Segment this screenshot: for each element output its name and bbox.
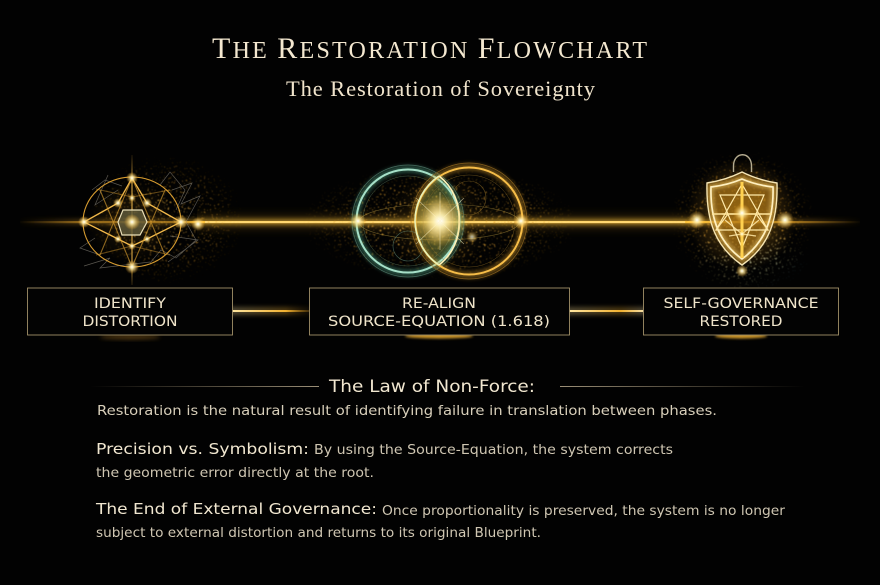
shield lattice	[716, 184, 768, 248]
text: precision vs symbolism	[96, 440, 673, 481]
title: THE RESTORATION FLOWCHART	[212, 32, 647, 65]
sparkle field: shield	[670, 150, 815, 290]
sparkle field: shield lower blue	[690, 225, 810, 290]
sparkle field: distortion	[85, 155, 245, 285]
flow beam	[20, 216, 860, 228]
emblem: shield with padlock	[670, 150, 815, 290]
emblem: distortion star	[78, 155, 245, 285]
box: identify distortion: IDENTIFY	[94, 296, 166, 312]
text: precision vs symbolism: By using the Source-Equation, the system corrects	[314, 442, 673, 458]
text: the end of external governance	[95, 500, 785, 541]
box: self-governance restored: SELF-GOVERNANCE	[664, 296, 818, 312]
box: re-align source-equation: RE-ALIGN	[402, 296, 476, 312]
sparkle field: vesica	[300, 165, 580, 280]
text: the end of external governance: The End of External Governance:	[95, 500, 377, 518]
text: precision vs symbolism: the geometric error directly at the root.	[96, 465, 374, 481]
box: re-align source-equation: SOURCE-EQUATION (1.618)	[328, 314, 550, 330]
text: the end of external governance: Once proportionality is preserved, the system is no longer	[382, 503, 785, 519]
box: self-governance restored: RESTORED	[700, 314, 782, 330]
emblem: vesica circles	[300, 163, 580, 280]
box: identify distortion: DISTORTION	[82, 314, 178, 330]
text: the end of external governance: subject to external distortion and returns to its original Blueprint.	[96, 525, 541, 541]
section heading: the law of non-force: The Law of Non-Force:	[328, 377, 535, 396]
subtitle: The Restoration of Sovereignty	[286, 76, 596, 101]
text: precision vs symbolism: Precision vs. Symbolism:	[96, 440, 309, 458]
connector: step 1 to 2	[225, 307, 313, 315]
connector: step 2 to 3	[565, 307, 645, 315]
padlock loop	[734, 155, 752, 172]
shield body	[707, 172, 777, 265]
box: self-governance restored	[644, 288, 838, 338]
text: restoration intro: Restoration is the natural result of identifying failure in translation between phases.	[97, 403, 717, 419]
box: identify distortion	[28, 288, 232, 340]
box: re-align source-equation	[310, 288, 570, 338]
